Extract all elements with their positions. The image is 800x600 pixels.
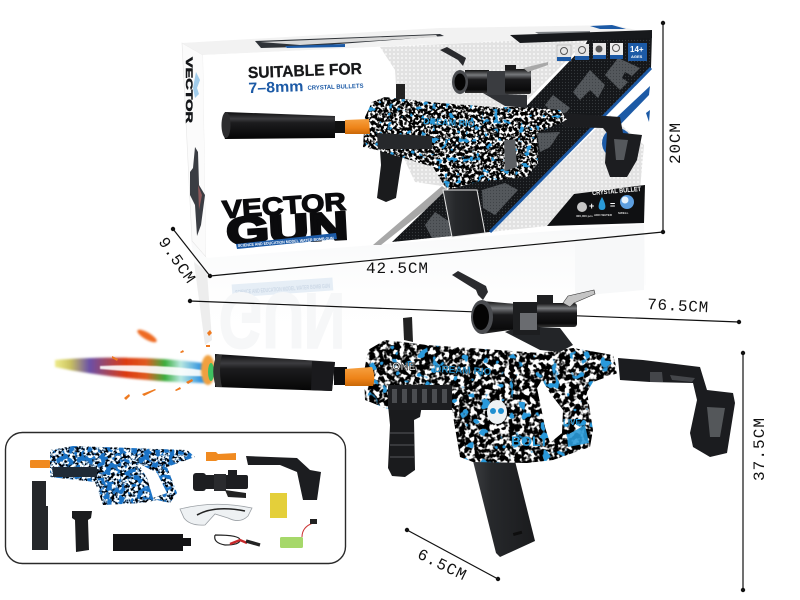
stock (618, 358, 735, 457)
box blue accents (602, 86, 650, 158)
box black diagonal band (392, 34, 652, 242)
dimension: gun height: 37.5CM (751, 418, 769, 481)
box gun rail (377, 133, 432, 149)
beam core (100, 365, 208, 376)
box bottom panel: crystal bullet: CRYSTAL BULLET (592, 186, 641, 197)
accessory: gun rail (53, 467, 97, 477)
scope bell (482, 301, 517, 334)
dimension: box width (210, 230, 665, 278)
heading: suitable for: 7–8mm (248, 78, 304, 97)
dimension: gun length (188, 296, 741, 324)
gun body graffiti (364, 340, 618, 463)
box side face: VECTOR (184, 57, 194, 124)
box top face (182, 25, 652, 55)
accessory: orange tube (206, 452, 236, 461)
scope block (513, 302, 540, 335)
magazine (473, 461, 535, 557)
box gun text: DREAM RIO (423, 116, 475, 129)
box side face (182, 43, 206, 257)
box band lettering (425, 58, 640, 238)
flying ember (136, 327, 158, 345)
lens cap left (452, 271, 488, 300)
box gun suppressor (222, 112, 335, 139)
box gun orange muzzle (345, 119, 370, 134)
main gun (213, 271, 735, 557)
box gun body (363, 97, 567, 190)
scope lens (471, 300, 493, 334)
age badge 14+ (628, 43, 647, 61)
accessory: usb charging cable (215, 535, 260, 545)
box bottom panel: crystal bullet: SWELL (618, 211, 629, 215)
heading: suitable for: SUITABLE FOR (248, 61, 363, 82)
dimension: box height (661, 21, 685, 232)
rear sight (403, 317, 413, 342)
gun body markings (392, 361, 589, 449)
suppressor (213, 354, 335, 391)
accessory: gun muzzle (30, 460, 50, 468)
box gun window (504, 139, 517, 171)
box blue edge line (490, 68, 651, 232)
dimension: box depth: 9.5CM (154, 234, 198, 287)
gun body markings: BOLT (511, 433, 549, 449)
panel frame (6, 432, 346, 564)
accessory: folding stock (246, 456, 321, 500)
box gun barrel (335, 121, 347, 133)
logo: vector gun: VECTOR (221, 188, 347, 224)
sparks (112, 330, 212, 400)
accessory: battery (280, 519, 317, 548)
dimension: gun length: 76.5CM (647, 296, 709, 317)
box gun foregrip (377, 150, 404, 202)
accessory: grip (72, 511, 92, 552)
accessory: safety goggles (180, 504, 252, 525)
dimension: box depth (154, 227, 212, 287)
dimension: gun height (741, 351, 769, 592)
logo: vector gun: SCIENCE AND EDUCATION MODEL WATER BOMB GUN (238, 235, 334, 248)
gun body markings: ONE (392, 361, 416, 373)
box grey diagonal stripe (373, 186, 449, 245)
box gun magazine (443, 190, 485, 237)
age badge 14+: 14+ (630, 45, 644, 54)
accessory: suppressor (113, 534, 191, 551)
heading: suitable for (248, 61, 364, 97)
box bottom panel: crystal bullet (547, 185, 645, 226)
accessory: gun body (50, 446, 195, 505)
barrel connector (334, 367, 347, 385)
scope knob (537, 295, 553, 304)
box reflection: GUN (219, 277, 345, 365)
dimension: box height: 20CM (667, 123, 685, 164)
muzzle flash (55, 327, 215, 400)
dimension: box width: 42.5CM (366, 260, 428, 278)
box reflection (191, 224, 646, 365)
box bottom panel: crystal bullet: = (610, 200, 615, 210)
orange muzzle (345, 367, 374, 386)
dimension: gun width (405, 528, 500, 585)
box gun rear sight (396, 84, 405, 99)
scope main tube (537, 303, 577, 327)
scope mount (505, 326, 573, 352)
foregrip (388, 405, 422, 477)
logo: vector gun: GUN (225, 205, 349, 254)
rainbow beam (55, 358, 208, 383)
optical scope (452, 271, 595, 352)
box bottom panel: crystal bullet: + (589, 201, 594, 211)
box front face (203, 34, 652, 257)
box bottom panel: crystal bullet: ADD WATER (594, 213, 613, 217)
accessory: scope (193, 470, 248, 498)
box gun scope (440, 47, 548, 108)
gun body markings: LIVE (563, 418, 581, 427)
accessory: bullet packet (270, 493, 287, 518)
heading: suitable for: CRYSTAL BULLETS (307, 83, 364, 92)
box reflection: SCIENCE AND EDUCATION MODEL WATER BOMB GUN (235, 284, 330, 296)
box feature icons (557, 43, 623, 61)
accessory: magazine (32, 481, 48, 550)
lens cap right (563, 290, 595, 307)
age badge 14+: AGES (631, 54, 643, 59)
logo: vector gun (221, 188, 349, 254)
accessory rail (388, 385, 452, 410)
box gun (222, 47, 642, 237)
muzzle glow (201, 355, 215, 385)
dimension: gun width: 6.5CM (414, 546, 469, 585)
product box (182, 25, 652, 257)
accessories panel (6, 432, 346, 564)
box gun stock (563, 113, 642, 177)
box lower right dotted panel (490, 115, 644, 232)
box front dotted grey panel (380, 37, 590, 186)
gun body markings: DREAM RIO (434, 364, 492, 378)
box bottom panel: crystal bullet: 300,000 pcs (576, 214, 593, 218)
box top dark strip (510, 30, 652, 43)
